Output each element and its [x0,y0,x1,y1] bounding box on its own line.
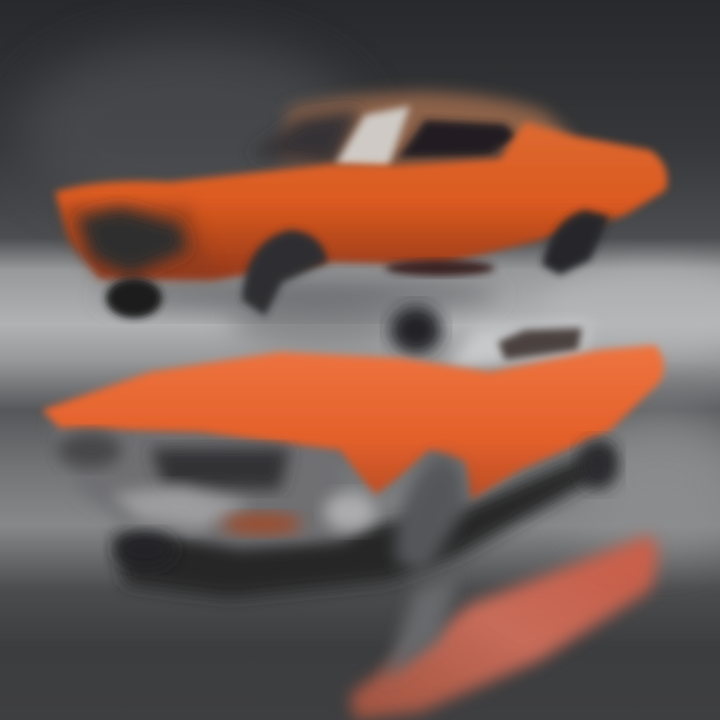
bottom car: right headlight highlight [324,492,376,532]
bottom car: lower bumper orange [222,513,302,535]
reflection of the orange car on the floor [350,535,658,720]
bottom car: left headlight shadow [58,432,122,468]
top car: front grille [78,208,188,275]
top car: underside [385,260,495,276]
bottom car [42,306,664,598]
bottom car: chrome highlight [110,485,250,530]
bottom car: body [42,345,664,500]
top car: white door pillar [335,106,410,168]
top car: side window [398,120,518,158]
bottom car: grille and chrome bumper [50,420,385,548]
bottom car: white roof pillar [445,322,590,370]
top car: front fascia shading [62,205,215,278]
reflection: grey wheel [385,575,458,680]
top car: front wheel [106,278,162,318]
bottom car: rear wheel [578,441,618,489]
bottom car: front wheel [395,455,466,575]
top car: ground shadow [100,277,500,313]
top car: middle wheel [242,230,328,316]
top car: windshield [250,110,360,165]
bottom car: side window [498,328,582,360]
bottom car: left tyre [115,532,175,568]
bottom car: road shadow [115,445,610,598]
top car [55,92,667,318]
top car: body [55,122,667,280]
bottom car: dark tyre above hood [390,306,442,354]
top car: roof [280,92,575,165]
top car: rear wheel [542,210,610,275]
bottom car: grille shadow [150,448,290,490]
